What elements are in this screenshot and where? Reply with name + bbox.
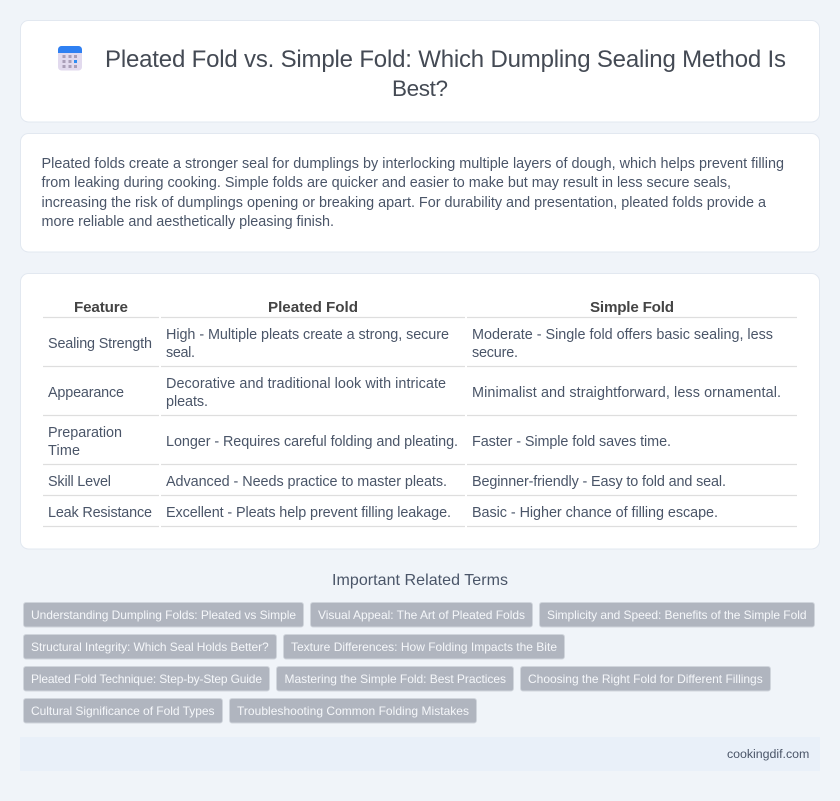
row: sealing strength: secure.: [472, 345, 518, 361]
tag: [540, 602, 814, 627]
row: sealing strength: [48, 327, 773, 361]
row: sealing strength: seal.: [166, 345, 195, 361]
row: skill level: Beginner-friendly - Easy to fold and seal.: [472, 474, 726, 490]
row: preparation time: [48, 425, 671, 459]
footer bar: [20, 737, 820, 771]
row: preparation time: Longer - Requires careful folding and pleating.: [166, 434, 458, 450]
row: skill level: Advanced - Needs practice to master pleats.: [166, 474, 447, 490]
tag: Choosing the Right Fold for Different Fillings: [528, 672, 763, 686]
tag: Pleated Fold Technique: Step-by-Step Guide: [31, 672, 262, 686]
table header: Pleated Fold: [268, 299, 358, 316]
heading: related terms: Important Related Terms: [332, 572, 508, 589]
row: leak resistance: Excellent - Pleats help prevent filling leakage.: [166, 505, 451, 521]
row: appearance: Decorative and traditional look with intricate: [166, 376, 446, 392]
table header: [74, 299, 674, 316]
title: Best?: [392, 76, 448, 101]
tag: Texture Differences: How Folding Impacts the Bite: [291, 640, 557, 654]
tag: [24, 602, 304, 627]
row: preparation time: Time: [48, 443, 80, 459]
tag: [284, 634, 564, 659]
row: leak resistance: [48, 505, 718, 521]
panel: intro paragraph: from leaking during cooking. Simple folds are quicker and easier to make but may result in less secure seals,: [42, 175, 731, 191]
tag: [24, 666, 270, 691]
panel: intro paragraph: [20, 134, 820, 252]
panel: intro paragraph: more reliable and aesthetically pleasing finish.: [42, 214, 334, 230]
tag: [310, 602, 532, 627]
tag: Simplicity and Speed: Benefits of the Simple Fold: [547, 608, 806, 622]
table header: Simple Fold: [590, 299, 674, 316]
tag: [24, 698, 222, 723]
row: sealing strength: Sealing Strength: [48, 336, 152, 352]
row: appearance: Minimalist and straightforward, less ornamental.: [472, 385, 781, 401]
panel: intro paragraph: increasing the risk of dumplings opening or breaking apart. For durability and presentation, pleated folds provide a: [42, 195, 766, 211]
panel: comparison table: [20, 274, 820, 549]
row: appearance: pleats.: [166, 394, 208, 410]
row: skill level: Skill Level: [48, 474, 111, 490]
row: leak resistance: Basic - Higher chance of filling escape.: [472, 505, 718, 521]
row: preparation time: Faster - Simple fold saves time.: [472, 434, 671, 450]
row: preparation time: Preparation: [48, 425, 122, 441]
panel: intro paragraph: Pleated folds create a stronger seal for dumplings by interlocking multiple layers of dough, which helps prevent filling: [42, 156, 784, 172]
title: Pleated Fold vs. Simple Fold: Which Dumpling Sealing Method Is: [105, 46, 786, 73]
row: leak resistance: Leak Resistance: [48, 505, 152, 521]
tag: Cultural Significance of Fold Types: [31, 704, 214, 718]
title: [105, 46, 786, 101]
row: appearance: [48, 376, 781, 410]
row: sealing strength: Moderate - Single fold offers basic sealing, less: [472, 327, 773, 343]
tag: [24, 634, 276, 659]
tag: [520, 666, 770, 691]
related term tags: [24, 602, 814, 723]
row: skill level: [48, 474, 726, 490]
row: appearance: Appearance: [48, 385, 124, 401]
tag: [276, 666, 514, 691]
tag: Troubleshooting Common Folding Mistakes: [237, 704, 469, 718]
tag: [230, 698, 476, 723]
row: sealing strength: High - Multiple pleats create a strong, secure: [166, 327, 449, 343]
footer bar: cookingdif.com: [727, 747, 809, 761]
tag: Understanding Dumpling Folds: Pleated vs Simple: [31, 608, 296, 622]
icon: calendar: [58, 46, 82, 70]
tag: Structural Integrity: Which Seal Holds Better?: [31, 640, 269, 654]
table header: Feature: [74, 299, 128, 316]
panel: title card: [20, 20, 820, 122]
tag: Mastering the Simple Fold: Best Practices: [284, 672, 506, 686]
tag: Visual Appeal: The Art of Pleated Folds: [318, 608, 525, 622]
